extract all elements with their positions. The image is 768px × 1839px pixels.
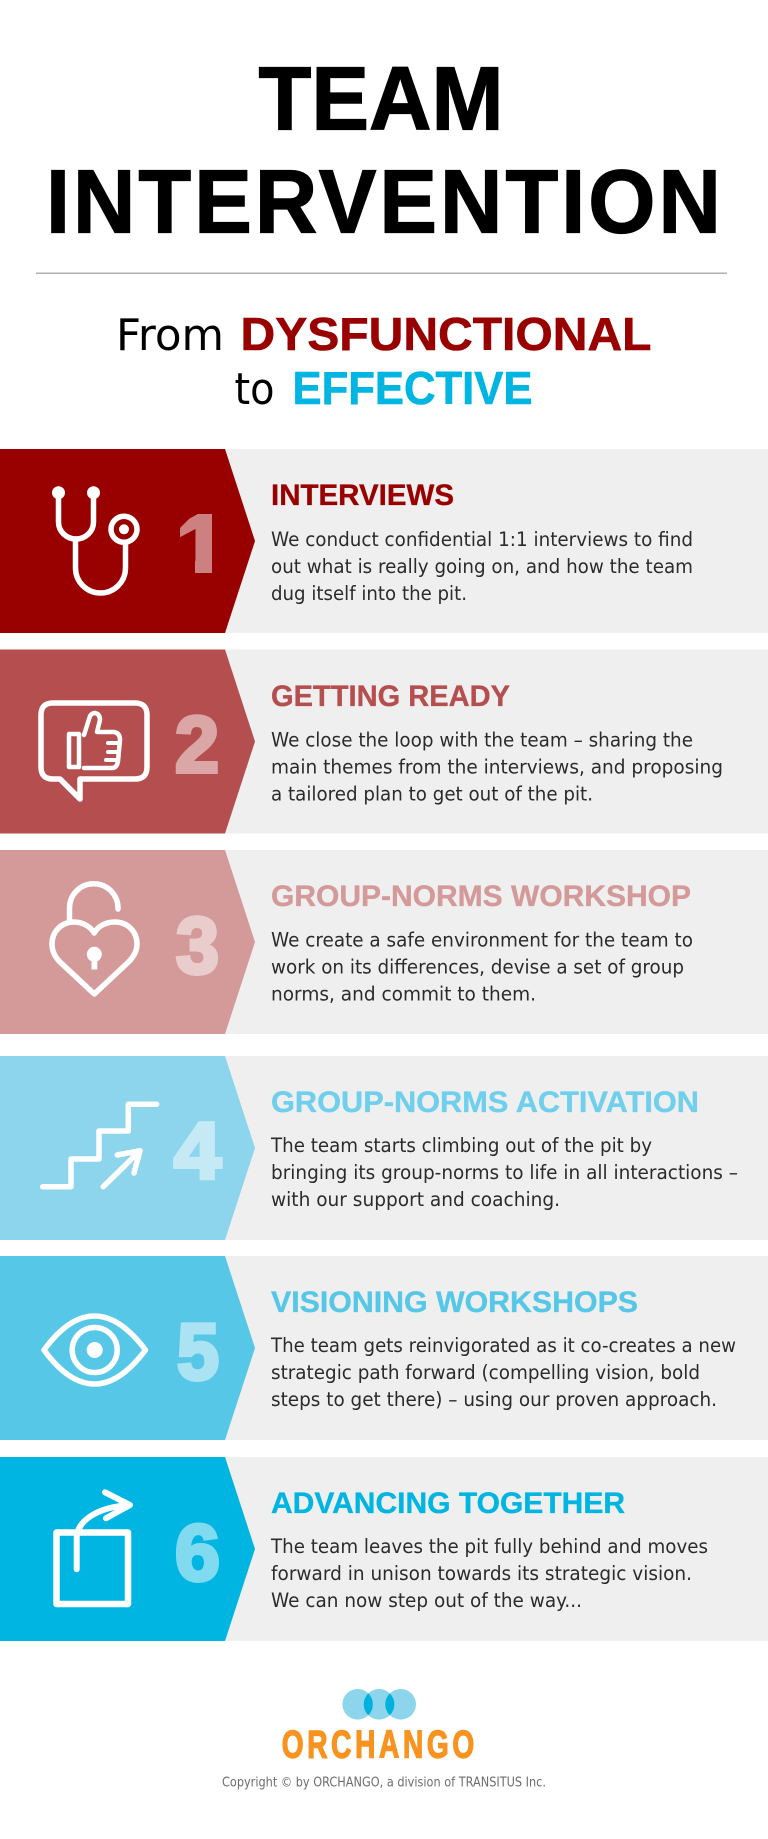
text block: dug itself into the pit.: [271, 582, 467, 605]
number 6: 6: [175, 1508, 220, 1597]
text block: We conduct confidential 1:1 interviews to find: [271, 528, 693, 551]
number 1: 1: [176, 499, 228, 588]
subtitle: [116, 308, 652, 415]
text block: [270, 1134, 738, 1211]
copyright: Copyright © by ORCHANGO, a division of TRANSITUS Inc.: [222, 1774, 546, 1790]
text block: [271, 528, 693, 605]
icon: eye: [44, 1316, 146, 1384]
title: [46, 50, 721, 252]
icon: stethoscope: [52, 486, 137, 593]
text block: main themes from the interviews, and proposing: [271, 756, 723, 778]
text block: a tailored plan to get out of the pit.: [271, 782, 593, 806]
heading: GROUP-NORMS WORKSHOP: [271, 880, 691, 913]
icon: stairs with arrow: [43, 1104, 157, 1187]
panel: step 6 advancing together: [0, 1457, 768, 1641]
panel: step 3 group-norms workshop: [0, 850, 768, 1034]
panel: step 2 getting ready: [0, 650, 768, 834]
title: TEAM: [258, 50, 504, 150]
text block: [271, 928, 693, 1006]
subtitle: DYSFUNCTIONAL: [240, 308, 652, 360]
icon: three overlapping circles: [342, 1689, 416, 1720]
heading: VISIONING WORKSHOPS: [271, 1286, 638, 1319]
icon: heart padlock: [52, 884, 137, 994]
subtitle: From: [116, 310, 224, 361]
icon: thumbs up speech bubble: [41, 703, 147, 799]
text block: strategic path forward (compelling vision, bold: [271, 1361, 700, 1384]
icon: box with exit arrow: [56, 1492, 130, 1604]
text block: [271, 728, 723, 806]
text block: forward in unison towards its strategic vision.: [271, 1562, 692, 1585]
heading: GETTING READY: [271, 680, 510, 713]
text block: out what is really going on, and how the team: [271, 555, 693, 578]
text block: The team gets reinvigorated as it co-creates a new: [270, 1334, 736, 1357]
text block: We can now step out of the way...: [271, 1589, 582, 1612]
number 5: 5: [177, 1307, 219, 1396]
text block: bringing its group-norms to life in all interactions –: [271, 1161, 738, 1184]
text block: [270, 1535, 708, 1612]
text block: work on its differences, devise a set of group: [271, 956, 684, 978]
text block: with our support and coaching.: [271, 1188, 560, 1211]
title: INTERVENTION: [46, 151, 721, 252]
logo: Orchango: [282, 1689, 478, 1767]
panel: step 5 visioning workshops: [0, 1256, 768, 1440]
subtitle: to: [234, 364, 274, 415]
text block: norms, and commit to them.: [271, 982, 536, 1006]
panel: step 4 group-norms activation: [0, 1056, 768, 1240]
heading: INTERVIEWS: [271, 479, 454, 512]
text block: The team starts climbing out of the pit by: [270, 1134, 652, 1157]
number 4: 4: [174, 1106, 222, 1195]
text block: We close the loop with the team – sharing the: [271, 728, 693, 752]
heading: GROUP-NORMS ACTIVATION: [271, 1086, 699, 1119]
text block: steps to get there) – using our proven approach.: [271, 1388, 717, 1411]
subtitle: EFFECTIVE: [292, 362, 532, 414]
heading: ADVANCING TOGETHER: [271, 1487, 625, 1520]
number 3: 3: [176, 901, 219, 990]
wordmark: ORCHANGO: [282, 1723, 478, 1767]
text block: [270, 1334, 736, 1411]
text block: We create a safe environment for the team to: [271, 928, 693, 952]
text block: The team leaves the pit fully behind and moves: [270, 1535, 708, 1558]
number 2: 2: [175, 700, 219, 789]
panel: step 1 interviews: [0, 449, 768, 633]
